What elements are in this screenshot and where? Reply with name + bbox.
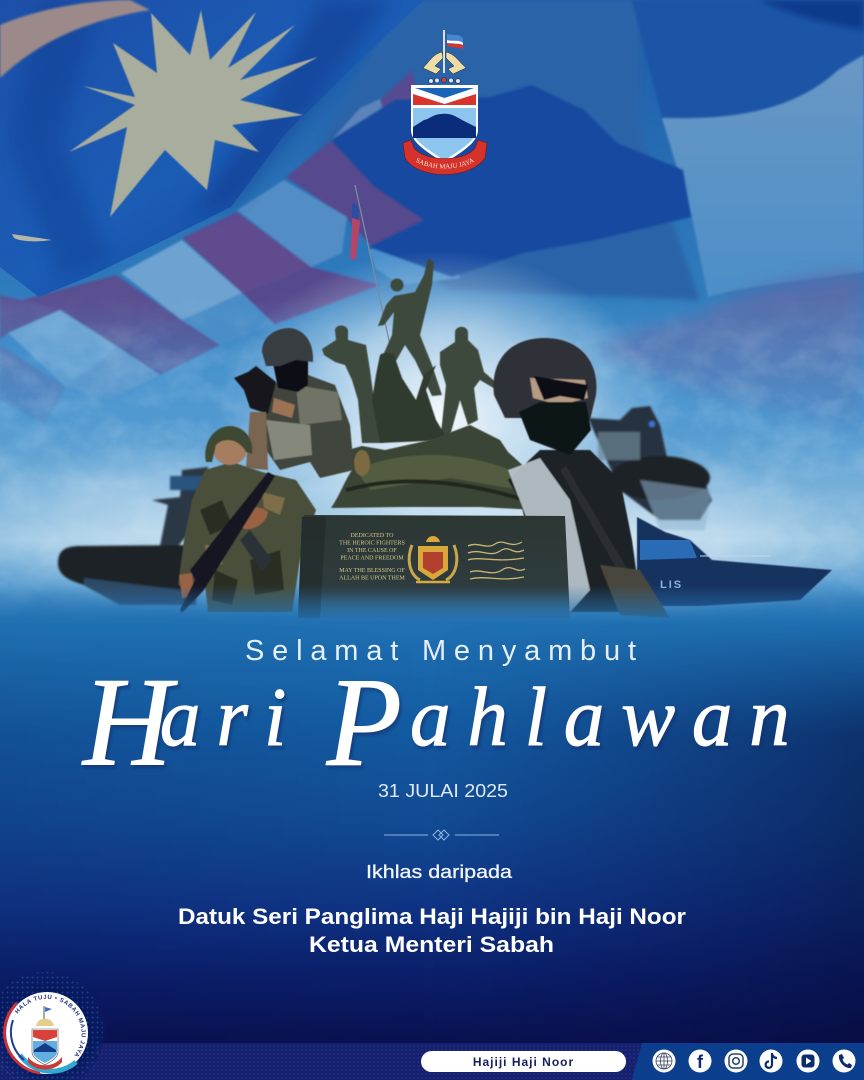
icon: globe xyxy=(652,1050,676,1072)
heading: Hari Pahlawan script: H xyxy=(81,652,178,793)
icon: video xyxy=(796,1050,820,1072)
monument plinth xyxy=(298,515,570,618)
boat upper right xyxy=(588,406,712,530)
boat lower right xyxy=(637,517,832,606)
masked soldier with rifle xyxy=(234,328,354,478)
icon: phone xyxy=(832,1050,856,1072)
statue: fallen soldiers and base xyxy=(331,425,537,510)
name pill: Hajiji Haji Noor xyxy=(473,1055,574,1069)
crest motto ribbon xyxy=(402,140,488,175)
plinth inscription xyxy=(339,533,406,582)
lower fade into water xyxy=(0,585,864,640)
flag: purple right swell xyxy=(595,270,864,430)
text: name and title: Datuk Seri Panglima Haji Hajiji bin Haji Noor xyxy=(178,904,686,929)
campaign badge xyxy=(0,972,103,1080)
icon: facebook xyxy=(688,1050,712,1072)
icon: instagram xyxy=(724,1050,748,1072)
statue: middle figures xyxy=(372,353,448,443)
plinth inscription: THE HEROIC FIGHTERS xyxy=(339,540,405,546)
flag: pale right panel xyxy=(662,55,864,297)
heading: Hari Pahlawan script xyxy=(81,652,806,793)
plinth inscription: ALLAH BE UPON THEM xyxy=(339,576,406,582)
plinth inscription: DEDICATED TO xyxy=(351,533,394,539)
statue: left soldier xyxy=(322,326,384,443)
heading: Hari Pahlawan script: P xyxy=(326,652,402,793)
monument flagpole and flag xyxy=(350,185,390,345)
flag backdrop xyxy=(0,0,864,560)
footer strip xyxy=(0,1043,864,1080)
state crest xyxy=(402,30,488,175)
flag: purple and pale stripes xyxy=(0,70,460,425)
text: Ikhlas daripada: Ikhlas daripada xyxy=(366,862,513,882)
ornamental divider xyxy=(384,830,499,840)
right masked soldier xyxy=(493,338,670,618)
flag: small crescent tip xyxy=(12,234,52,241)
crest arms xyxy=(423,52,466,74)
badge mini crest xyxy=(28,1006,62,1070)
hero photo collage xyxy=(0,185,864,640)
crest beads xyxy=(429,77,460,83)
icon: tiktok xyxy=(760,1050,782,1072)
statue: right soldier xyxy=(440,327,499,443)
boat lower right: LIS xyxy=(660,579,683,591)
heading: Selamat Menyambut: Selamat Menyambut xyxy=(245,635,636,667)
plinth coat of arms xyxy=(409,536,457,582)
statue: standing soldiers xyxy=(322,258,499,443)
crest flag xyxy=(447,34,463,49)
flag: sun star xyxy=(69,10,318,217)
plinth inscription: IN THE CAUSE OF xyxy=(347,548,398,554)
flag: upper middle field xyxy=(300,0,700,300)
footer blue panel xyxy=(632,1043,864,1080)
name pill xyxy=(421,1051,626,1072)
text: name and title: Ketua Menteri Sabah xyxy=(309,932,554,957)
flag: top-right blue fold xyxy=(632,0,864,118)
flag: canton fold shading xyxy=(10,0,390,280)
heading: Hari Pahlawan script: ahlawan xyxy=(410,670,806,763)
flag: top-right dark corner xyxy=(760,0,864,30)
pale mist behind figures xyxy=(0,250,860,630)
date: 31 JULAI 2025 xyxy=(378,781,508,801)
icon: facebook: f xyxy=(697,1052,704,1072)
plinth inscription: MAY THE BLESSING OF xyxy=(339,568,405,574)
badge arc text: HALA TUJU • SABAH MAJU JAYA xyxy=(14,994,86,1056)
crest flagpole xyxy=(443,30,445,73)
statue: raising soldier xyxy=(378,258,442,396)
plinth jawi script xyxy=(468,542,525,579)
flag: yellow crescent xyxy=(0,0,150,78)
flag: blue canton xyxy=(0,0,424,297)
camouflage soldier xyxy=(178,426,316,613)
page side shading xyxy=(0,634,864,1043)
text: name and title xyxy=(178,904,686,957)
lower flag wash xyxy=(0,300,864,560)
plinth inscription: PEACE AND FREEDOM xyxy=(340,556,404,562)
watercolor texture xyxy=(0,320,864,601)
statue: raising soldier head xyxy=(390,278,404,292)
crest motto ribbon: SABAH MAJU JAYA xyxy=(416,158,474,168)
crest shield xyxy=(411,85,478,164)
boat left xyxy=(58,467,208,605)
heading: Hari Pahlawan script: ari xyxy=(160,670,339,763)
social icons xyxy=(652,1050,856,1072)
flag: dark blue mountain fold xyxy=(331,85,691,277)
